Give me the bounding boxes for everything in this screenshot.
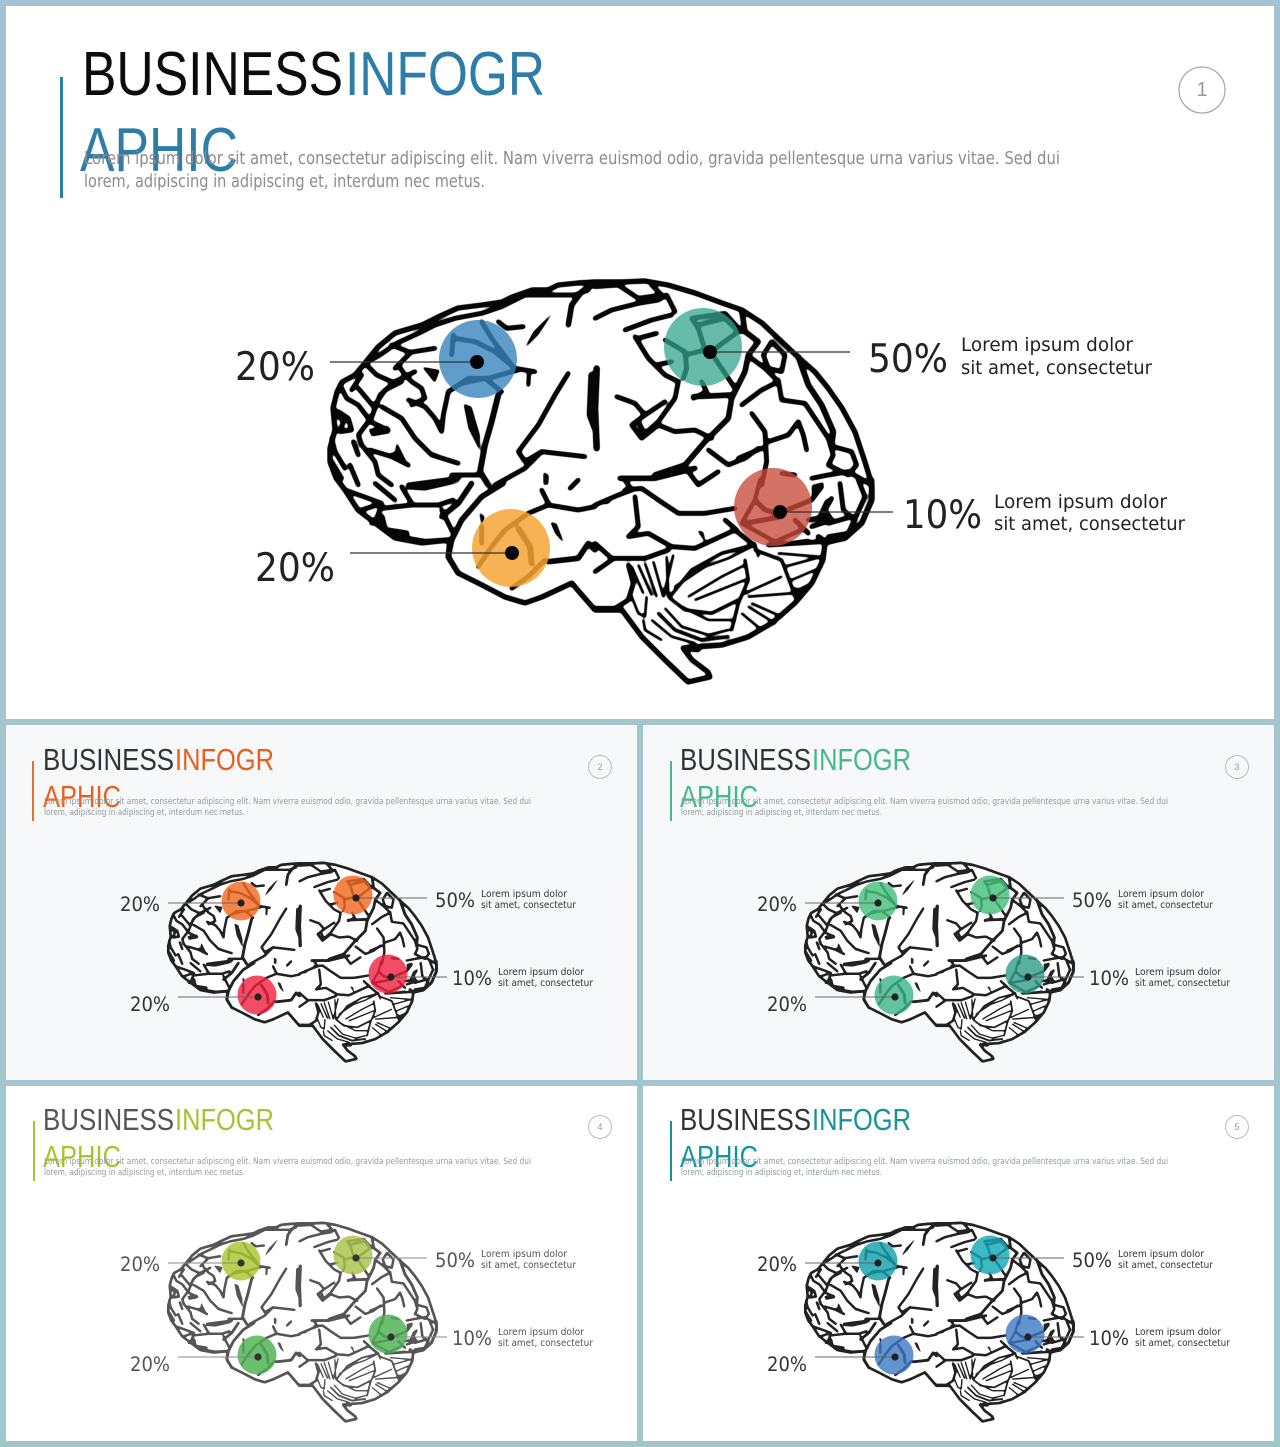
label: 20% upper: 20% — [235, 345, 315, 390]
value labels — [120, 1249, 593, 1376]
value labels — [757, 1249, 1230, 1376]
brain illustration — [805, 863, 1074, 1061]
hotspots and leader lines — [805, 1236, 1084, 1374]
accent bar — [670, 761, 672, 821]
value labels: 20% — [120, 893, 160, 916]
value labels: Lorem ipsum dolor — [498, 1327, 584, 1338]
title: APHIC — [43, 779, 121, 814]
value labels: sit amet, consectetur — [481, 900, 576, 911]
description: Lorem ipsum dolor sit amet, consectetur adipiscing elit. Nam viverra euismod odio, gravida pellentesque urna varius vitae. Sed dui — [681, 797, 1168, 807]
value labels: 20% — [757, 893, 797, 916]
hotspots and leader lines — [168, 1236, 447, 1374]
label: 20% lower: 20% — [255, 546, 335, 591]
description: lorem, adipiscing in adipiscing et, interdum nec metus. — [681, 808, 882, 818]
description: lorem, adipiscing in adipiscing et, interdum nec metus. — [84, 172, 485, 192]
title: APHIC — [680, 1139, 758, 1174]
hotspots and leader lines — [805, 876, 1084, 1014]
value labels — [757, 889, 1230, 1016]
value labels: 10% — [1089, 1327, 1129, 1350]
value labels: Lorem ipsum dolor — [1135, 1327, 1221, 1338]
hotspots and leader lines — [168, 876, 447, 1014]
description: Lorem ipsum dolor sit amet, consectetur adipiscing elit. Nam viverra euismod odio, gravida pellentesque urna varius vitae. Sed dui — [84, 149, 1060, 169]
value labels: sit amet, consectetur — [1135, 1338, 1230, 1349]
page number: 3 — [1234, 762, 1240, 772]
title: BUSINESS — [680, 742, 811, 777]
value labels: Lorem ipsum dolor — [1135, 967, 1221, 978]
title: BUSINESS — [680, 1102, 811, 1137]
value labels: 20% — [767, 1353, 807, 1376]
value labels: Lorem ipsum dolor — [498, 967, 584, 978]
value labels: 50% — [1072, 889, 1112, 912]
value labels: 20% — [120, 1253, 160, 1276]
brain illustration — [168, 863, 437, 1061]
value labels: 10% — [452, 1327, 492, 1350]
page number — [1226, 756, 1248, 778]
value labels: 10% — [1089, 967, 1129, 990]
label: 50% with text: Lorem ipsum dolor — [961, 334, 1133, 356]
value labels: sit amet, consectetur — [1118, 900, 1213, 911]
value labels: Lorem ipsum dolor — [481, 889, 567, 900]
brain illustration — [805, 1223, 1074, 1421]
value labels: 20% — [130, 993, 170, 1016]
title: INFOGR — [175, 1102, 274, 1137]
accent bar — [60, 77, 63, 198]
value labels: 50% — [435, 889, 475, 912]
hotspot: green — [664, 308, 850, 386]
description: Lorem ipsum dolor sit amet, consectetur adipiscing elit. Nam viverra euismod odio, gravida pellentesque urna varius vitae. Sed dui — [44, 1157, 531, 1167]
hotspot: blue — [330, 320, 517, 398]
accent bar — [33, 1121, 35, 1181]
panel: slide 3 green — [643, 725, 1274, 1080]
page number — [1226, 1116, 1248, 1138]
value labels: sit amet, consectetur — [498, 1338, 593, 1349]
accent bar — [670, 1121, 672, 1181]
value labels: Lorem ipsum dolor — [481, 1249, 567, 1260]
page number — [1179, 67, 1225, 113]
title: BUSINESS — [43, 1102, 174, 1137]
title: INFOGR — [345, 40, 545, 109]
title: APHIC — [680, 779, 758, 814]
hotspot: red — [734, 468, 893, 546]
page number: 4 — [597, 1122, 603, 1132]
title: INFOGR — [812, 742, 911, 777]
title: BUSINESS — [43, 742, 174, 777]
value labels: 20% — [757, 1253, 797, 1276]
title: INFOGR — [812, 1102, 911, 1137]
brain illustration — [330, 281, 872, 682]
panel: main slide — [6, 6, 1274, 719]
title: APHIC — [80, 116, 238, 185]
label: 50% with text — [868, 334, 1152, 382]
page number: 5 — [1234, 1122, 1240, 1132]
description: Lorem ipsum dolor sit amet, consectetur adipiscing elit. Nam viverra euismod odio, gravida pellentesque urna varius vitae. Sed dui — [44, 797, 531, 807]
title: APHIC — [43, 1139, 121, 1174]
value labels: 20% — [130, 1353, 170, 1376]
description: Lorem ipsum dolor sit amet, consectetur adipiscing elit. Nam viverra euismod odio, gravida pellentesque urna varius vitae. Sed dui — [681, 1157, 1168, 1167]
value labels: sit amet, consectetur — [498, 978, 593, 989]
value labels: sit amet, consectetur — [481, 1260, 576, 1271]
brain illustration — [168, 1223, 437, 1421]
label: 50% with text: 50% — [868, 337, 948, 382]
value labels: Lorem ipsum dolor — [1118, 889, 1204, 900]
panel: slide 4 yellow-green — [6, 1086, 637, 1441]
panel: slide 2 orange — [6, 725, 637, 1080]
accent bar — [32, 761, 34, 821]
value labels: sit amet, consectetur — [1135, 978, 1230, 989]
panel: slide 5 teal — [643, 1086, 1274, 1441]
label: 10% with text — [903, 491, 1185, 538]
value labels — [120, 889, 593, 1016]
page number — [588, 1116, 612, 1138]
page number: 1 — [1196, 79, 1208, 101]
page number: 2 — [597, 762, 603, 772]
value labels: 20% — [767, 993, 807, 1016]
title: INFOGR — [175, 742, 274, 777]
page number — [588, 756, 612, 778]
description: lorem, adipiscing in adipiscing et, interdum nec metus. — [44, 808, 245, 818]
hotspot: orange — [350, 509, 550, 587]
label: 10% with text: sit amet, consectetur — [994, 513, 1185, 535]
value labels: sit amet, consectetur — [1118, 1260, 1213, 1271]
description: lorem, adipiscing in adipiscing et, interdum nec metus. — [681, 1168, 882, 1178]
title: BUSINESS — [82, 40, 343, 109]
value labels: 50% — [435, 1249, 475, 1272]
label: 10% with text: Lorem ipsum dolor — [994, 491, 1167, 513]
label: 10% with text: 10% — [903, 493, 982, 538]
value labels: 10% — [452, 967, 492, 990]
value labels: Lorem ipsum dolor — [1118, 1249, 1204, 1260]
description: lorem, adipiscing in adipiscing et, interdum nec metus. — [44, 1168, 245, 1178]
value labels: 50% — [1072, 1249, 1112, 1272]
label: 50% with text: sit amet, consectetur — [961, 357, 1152, 379]
